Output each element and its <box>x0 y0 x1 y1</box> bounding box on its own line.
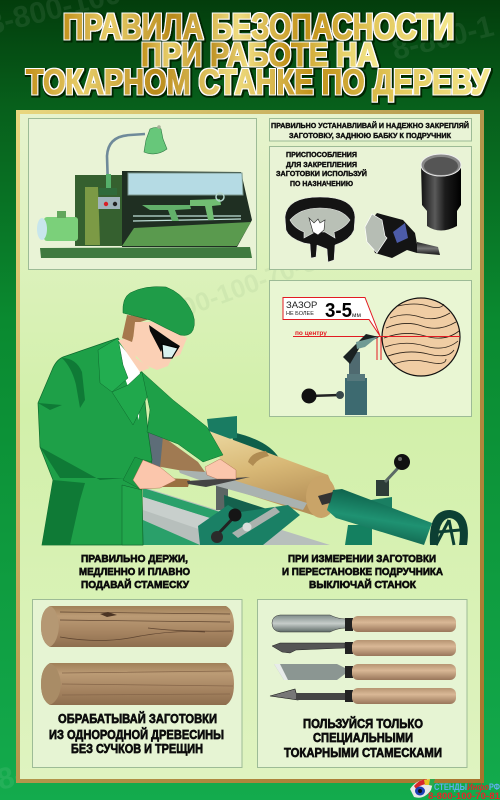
gap label: 3-5 <box>325 300 352 322</box>
glasses <box>149 325 180 358</box>
neck <box>118 338 150 372</box>
watermarks on background: 8-800-100-70-81 <box>0 711 219 797</box>
chisel caption: СПЕЦИАЛЬНЫМИ <box>313 731 413 745</box>
icon: wood section <box>382 298 460 376</box>
coat body <box>38 338 152 545</box>
logo: СТЕНДЫ <box>434 782 467 792</box>
panel: logs <box>32 600 242 768</box>
logo <box>410 779 500 800</box>
icon: flat chisel <box>274 664 456 680</box>
caption: switch off: ВЫКЛЮЧАЙ СТАНОК <box>309 578 417 591</box>
icon: machine body <box>122 171 252 247</box>
icon: carriage <box>142 205 191 221</box>
caption: switch off: И ПЕРЕСТАНОВКЕ ПОДРУЧНИКА <box>282 566 443 578</box>
icon: tailstock <box>190 199 221 220</box>
hands <box>133 459 236 489</box>
lathe machine bed <box>143 487 330 545</box>
fixtures text: ДЛЯ ЗАКРЕПЛЕНИЯ <box>286 162 357 169</box>
panel: install instruction: ЗАГОТОВКУ, ЗАДНЮЮ БАБКУ К ПОДРУЧНИК <box>289 133 452 140</box>
coat shading <box>38 358 143 545</box>
log caption <box>49 711 224 756</box>
caption: switch off: ПРИ ИЗМЕРЕНИИ ЗАГОТОВКИ <box>288 553 436 565</box>
icon: gouge chisel <box>272 615 456 632</box>
chisel in hands <box>162 477 250 487</box>
gap label: НЕ БОЛЕЕ <box>286 311 314 317</box>
dark inner behind <box>224 495 270 530</box>
hat <box>123 287 194 335</box>
log caption: ОБРАБАТЫВАЙ ЗАГОТОВКИ <box>58 711 217 726</box>
panel: lathe machine <box>28 118 256 270</box>
icon: defective log <box>41 606 234 647</box>
icon: control box <box>98 197 120 209</box>
icon: skew chisel <box>272 640 456 656</box>
icon: open chuck <box>285 197 355 262</box>
caption: hold chisel: ПРАВИЛЬНО ДЕРЖИ, <box>81 553 188 565</box>
fixtures text: ПРИСПОСОБЛЕНИЯ <box>286 152 357 159</box>
chisel caption: ПОЛЬЗУЙСЯ ТОЛЬКО <box>303 716 423 731</box>
log caption: БЕЗ СУЧКОВ И ТРЕЩИН <box>71 742 203 756</box>
gap label: мм <box>352 312 361 319</box>
icon: tool rest <box>302 334 379 415</box>
icon: glass guard <box>128 173 243 195</box>
caption: hold chisel: ПОДАВАЙ СТАМЕСКУ <box>81 578 189 591</box>
icon: collet chuck <box>365 213 440 258</box>
title <box>26 6 490 102</box>
caption: switch off <box>282 553 443 591</box>
caption: hold chisel <box>79 553 190 591</box>
log caption: ИЗ ОДНОРОДНОЙ ДРЕВЕСИНЫ <box>49 727 224 742</box>
icon: lead screws <box>133 216 241 221</box>
icon: headstock cabinet <box>75 175 125 246</box>
tailstock <box>318 454 432 545</box>
hair <box>122 315 153 342</box>
title: ПРИ РАБОТЕ НА <box>141 36 378 73</box>
far arm behind <box>147 432 205 472</box>
center label: по центру <box>295 330 327 337</box>
gap label <box>283 298 380 336</box>
icon: motor <box>37 211 78 241</box>
workpiece <box>209 431 337 518</box>
steel tool rest post <box>216 478 228 510</box>
icon: lower green housing <box>122 222 251 246</box>
face <box>133 322 187 370</box>
panel: fixtures <box>270 146 472 270</box>
gap label: ЗАЗОР <box>286 300 317 311</box>
main panel: 8-800-100-70-81 <box>142 241 334 336</box>
clamp and slot <box>198 505 300 545</box>
icon: good log <box>41 663 234 705</box>
chisel caption: ТОКАРНЫМИ СТАМЕСКАМИ <box>284 746 442 760</box>
icon: cylindrical cup <box>421 154 461 230</box>
watermarks on background: 8-800-1 <box>389 10 497 67</box>
logo: Инфо <box>467 782 489 792</box>
far arm shadow <box>146 432 163 468</box>
icon: gap lines <box>293 336 460 360</box>
icon: lamp <box>99 125 167 195</box>
panel: install instruction: ПРАВИЛЬНО УСТАНАВЛИВАЙ И НАДЕЖНО ЗАКРЕПЛЯЙ <box>271 121 469 130</box>
icon: pointed chisel <box>270 688 456 704</box>
tool rest blade <box>175 462 307 510</box>
panel: chisels <box>258 600 467 768</box>
chisel caption <box>284 716 442 760</box>
caption: hold chisel: МЕДЛЕННО И ПЛАВНО <box>79 566 190 578</box>
left cuff <box>123 457 152 490</box>
panel: install instruction <box>270 118 472 141</box>
illustration: worker at lathe <box>38 287 468 545</box>
icon: headstock front <box>85 187 100 245</box>
shirt and collar <box>98 338 148 425</box>
right arm sleeve <box>142 372 223 462</box>
icon: logo eye <box>410 779 435 798</box>
icon: carriage wheel <box>216 193 224 201</box>
headstock <box>207 416 279 480</box>
panel: clearance diagram <box>270 280 472 416</box>
fixtures text: ПО НАЗНАЧЕНИЮ <box>290 181 353 188</box>
handwheel <box>430 510 468 545</box>
icon: lathe bed <box>40 247 252 258</box>
fixtures text: ЗАГОТОВКИ ИСПОЛЬЗУЙ <box>276 169 367 178</box>
fixtures text <box>276 152 367 188</box>
